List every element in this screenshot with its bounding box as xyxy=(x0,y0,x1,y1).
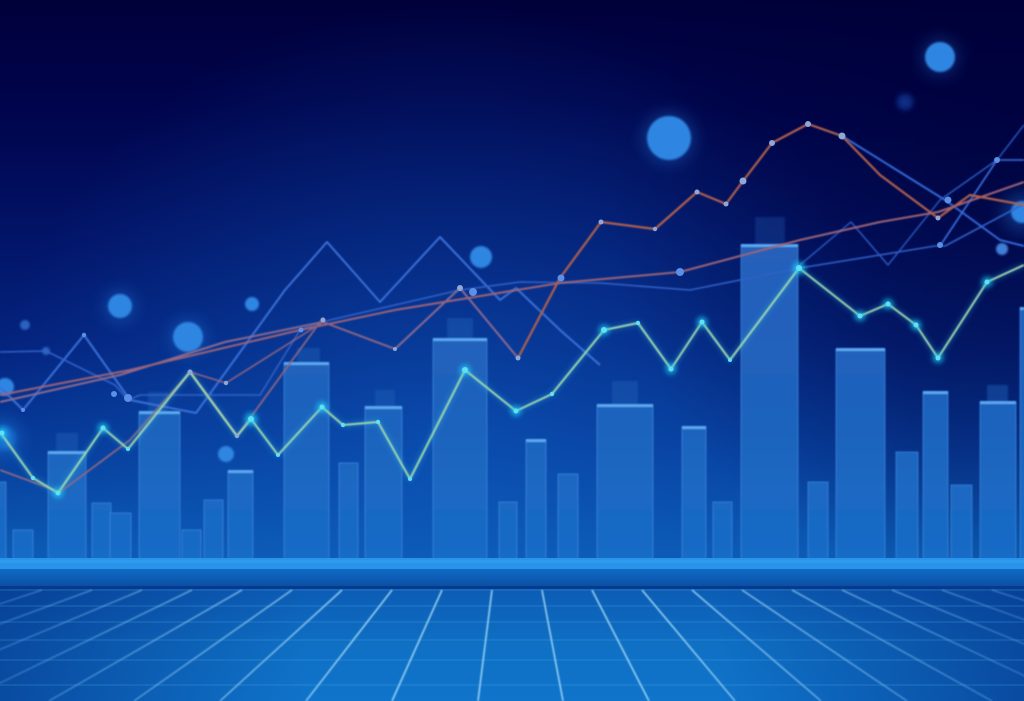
bar chart xyxy=(0,244,1024,560)
orange lines xyxy=(0,124,1024,492)
platform xyxy=(0,558,1024,589)
blue lines xyxy=(0,125,1024,413)
grid floor xyxy=(0,589,1024,701)
bar top highlights xyxy=(48,244,1024,473)
glowing circles xyxy=(0,39,1024,462)
yellow line xyxy=(0,265,1024,493)
data points xyxy=(0,121,1000,498)
ghost bar caps xyxy=(56,217,1008,452)
